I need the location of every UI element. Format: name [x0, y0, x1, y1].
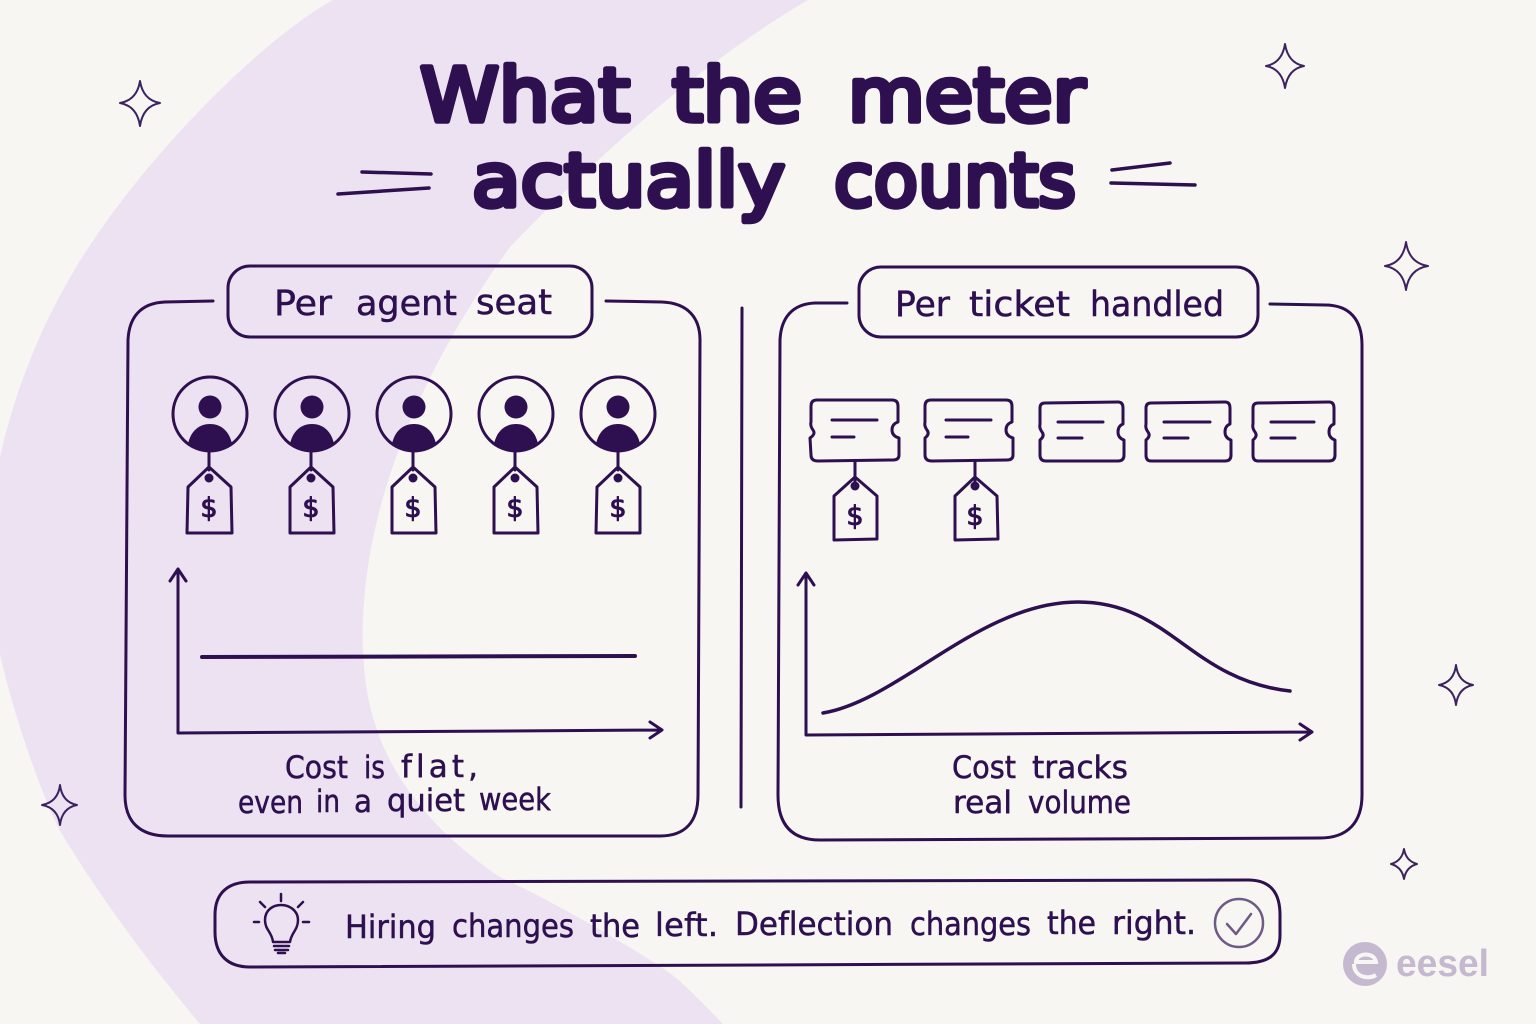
caption: cost is flat: even: [238, 785, 303, 821]
logo: eesel: [1343, 942, 1489, 986]
ticket 4: [1146, 402, 1231, 461]
ticket 1: [810, 400, 899, 461]
heading pill: [859, 267, 1258, 337]
caption: cost is flat: Cost: [285, 750, 348, 786]
caption: cost is flat: is: [364, 750, 385, 786]
caption: cost tracks: [952, 750, 1131, 821]
title: the: [672, 53, 802, 139]
heading pill: Per: [274, 284, 333, 324]
callout text: Deflection: [735, 905, 893, 943]
callout text: right.: [1112, 904, 1196, 942]
background crescent: [0, 0, 808, 1024]
title: meter: [848, 53, 1086, 139]
agent 1: $: [200, 493, 218, 524]
heading pill: handled: [1090, 285, 1224, 325]
agent 4: [479, 377, 553, 533]
tickets: [810, 400, 1335, 461]
price tag 1: $: [846, 501, 864, 532]
caption: cost tracks: volume: [1028, 785, 1131, 821]
panel frame: [125, 301, 700, 836]
callout text: [345, 904, 1196, 946]
icon: light bulb: [254, 894, 309, 953]
callout bar: [215, 880, 1280, 967]
caption: cost is flat: week: [479, 782, 551, 818]
callout text: changes: [910, 905, 1031, 943]
agent 5: $: [609, 493, 627, 524]
callout text: Hiring: [345, 908, 436, 946]
agent 5: [581, 377, 655, 533]
panel: per ticket handled: [778, 267, 1362, 840]
title: [420, 53, 1086, 224]
volume cost chart: [798, 573, 1312, 740]
caption: cost is flat: flat,: [401, 749, 478, 785]
price tag 1: [834, 461, 877, 540]
callout text: left.: [655, 906, 718, 944]
agent 3: [377, 377, 451, 533]
agent 2: [275, 377, 349, 533]
callout text: changes: [452, 907, 574, 945]
flat cost chart: [170, 569, 662, 738]
agent 1: [173, 377, 247, 533]
heading pill: ticket: [969, 285, 1070, 325]
caption: cost tracks: tracks: [1032, 750, 1128, 786]
ticket 3: [1040, 402, 1124, 461]
icon: check circle: [1215, 899, 1263, 947]
title: actually: [472, 138, 785, 224]
caption: cost tracks: Cost: [952, 750, 1016, 786]
title flourish: left: [338, 172, 431, 194]
panel: per agent seat: [125, 266, 700, 836]
caption: cost is flat: quiet: [387, 783, 465, 819]
caption: cost is flat: [238, 749, 551, 821]
divider: [741, 308, 742, 807]
ticket 5: [1253, 402, 1335, 461]
agent 4: $: [506, 493, 524, 524]
agents with price tags: [173, 377, 655, 533]
title flourish: right: [1111, 163, 1195, 185]
sparkle stars: [42, 44, 1473, 879]
title: What: [420, 53, 630, 139]
panel frame: [778, 303, 1362, 840]
heading pill: agent: [356, 284, 457, 324]
caption: cost tracks: real: [953, 785, 1012, 821]
caption: cost is flat: in: [316, 784, 340, 820]
ticket 2: [925, 400, 1013, 461]
callout text: the: [1047, 904, 1096, 942]
heading pill: Per: [895, 285, 951, 325]
caption: cost is flat: a: [354, 784, 372, 820]
agent 3: $: [404, 493, 422, 524]
heading pill: seat: [476, 283, 552, 323]
price tag 2: $: [966, 501, 984, 532]
title: counts: [834, 138, 1076, 224]
heading pill: [228, 266, 592, 337]
callout text: the: [590, 907, 640, 945]
agent 2: $: [302, 493, 320, 524]
logo: eesel: eesel: [1396, 943, 1489, 985]
price tag 2: [955, 461, 998, 540]
